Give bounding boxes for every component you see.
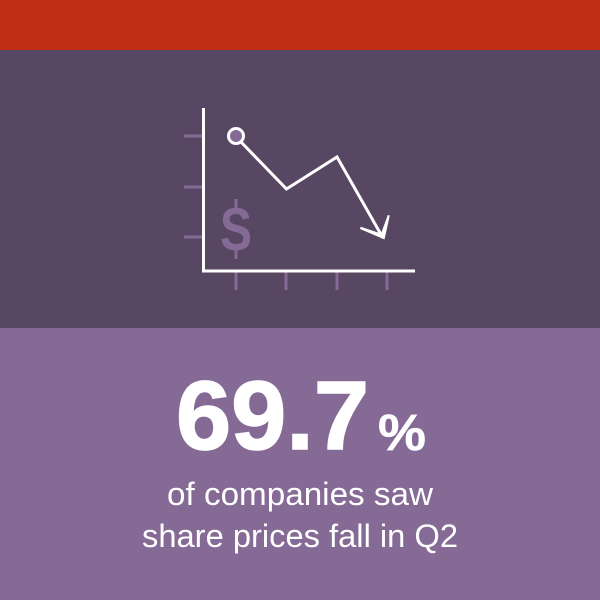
chart axes: [204, 108, 415, 271]
headline statistic: 69.7: [176, 361, 369, 470]
description text: share prices fall in Q2: [142, 518, 458, 554]
icon: falling share price chart: [184, 108, 415, 290]
description text: [142, 476, 458, 554]
dark chart panel: [0, 50, 600, 328]
axis ticks: [184, 136, 387, 290]
falling line with arrow: [241, 142, 390, 240]
light stat panel: [0, 328, 600, 600]
top red band: [0, 0, 600, 50]
description text: of companies saw: [167, 476, 434, 512]
headline statistic: %: [378, 404, 426, 461]
start point marker: [228, 128, 244, 144]
icon: dollar sign: S: [220, 196, 252, 263]
